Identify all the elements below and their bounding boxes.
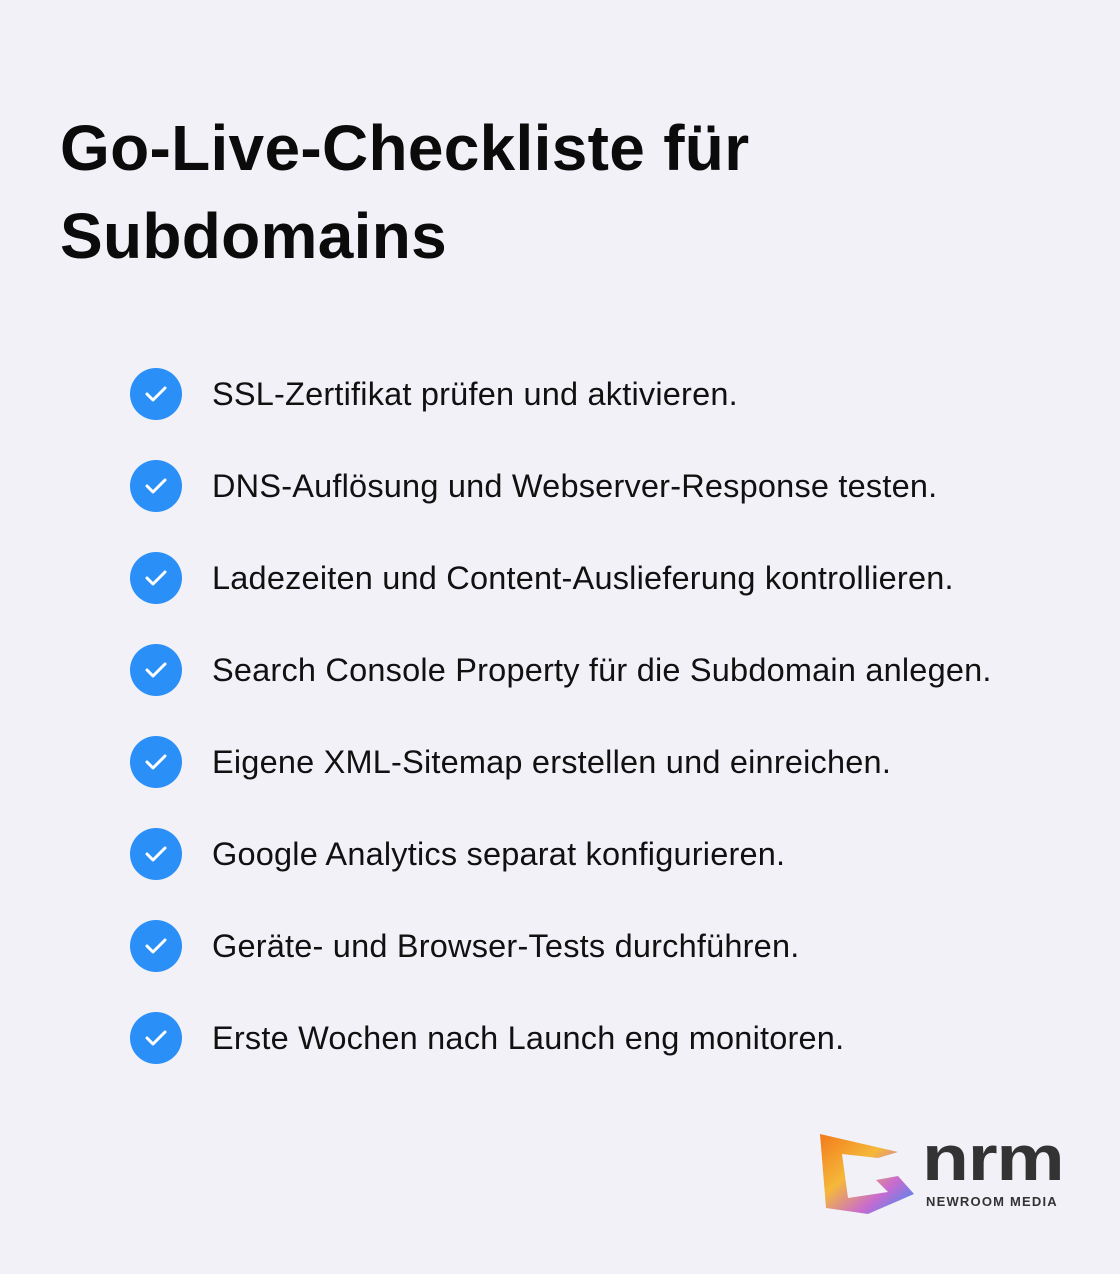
logo: NEWROOM MEDIA: [926, 1194, 1058, 1209]
item 8: Erste Wochen nach Launch eng monitoren.: [212, 1020, 844, 1056]
item 2: DNS-Auflösung und Webserver-Response testen.: [212, 468, 937, 504]
item 1: SSL-Zertifikat prüfen und aktivieren.: [212, 376, 738, 412]
item 4: [130, 644, 992, 696]
item 3: Ladezeiten und Content-Auslieferung kontrollieren.: [212, 560, 954, 596]
icon: logo mark: [820, 1134, 914, 1214]
title: Go-Live-Checkliste für: [60, 112, 749, 184]
logo: [820, 1122, 1063, 1214]
item 7: [130, 920, 799, 972]
logo text: nrm: [922, 1122, 1063, 1194]
item 3: [130, 552, 954, 604]
item 5: Eigene XML-Sitemap erstellen und einreichen.: [212, 744, 891, 780]
item 4: Search Console Property für die Subdomain anlegen.: [212, 652, 992, 688]
item 6: Google Analytics separat konfigurieren.: [212, 836, 785, 872]
title: Subdomains: [60, 200, 447, 272]
title: [60, 112, 749, 272]
item 6: [130, 828, 785, 880]
item 1: [130, 368, 738, 420]
item 7: Geräte- und Browser-Tests durchführen.: [212, 928, 799, 964]
item 8: [130, 1012, 844, 1064]
item 2: [130, 460, 937, 512]
item 5: [130, 736, 891, 788]
checklist: [130, 368, 992, 1064]
